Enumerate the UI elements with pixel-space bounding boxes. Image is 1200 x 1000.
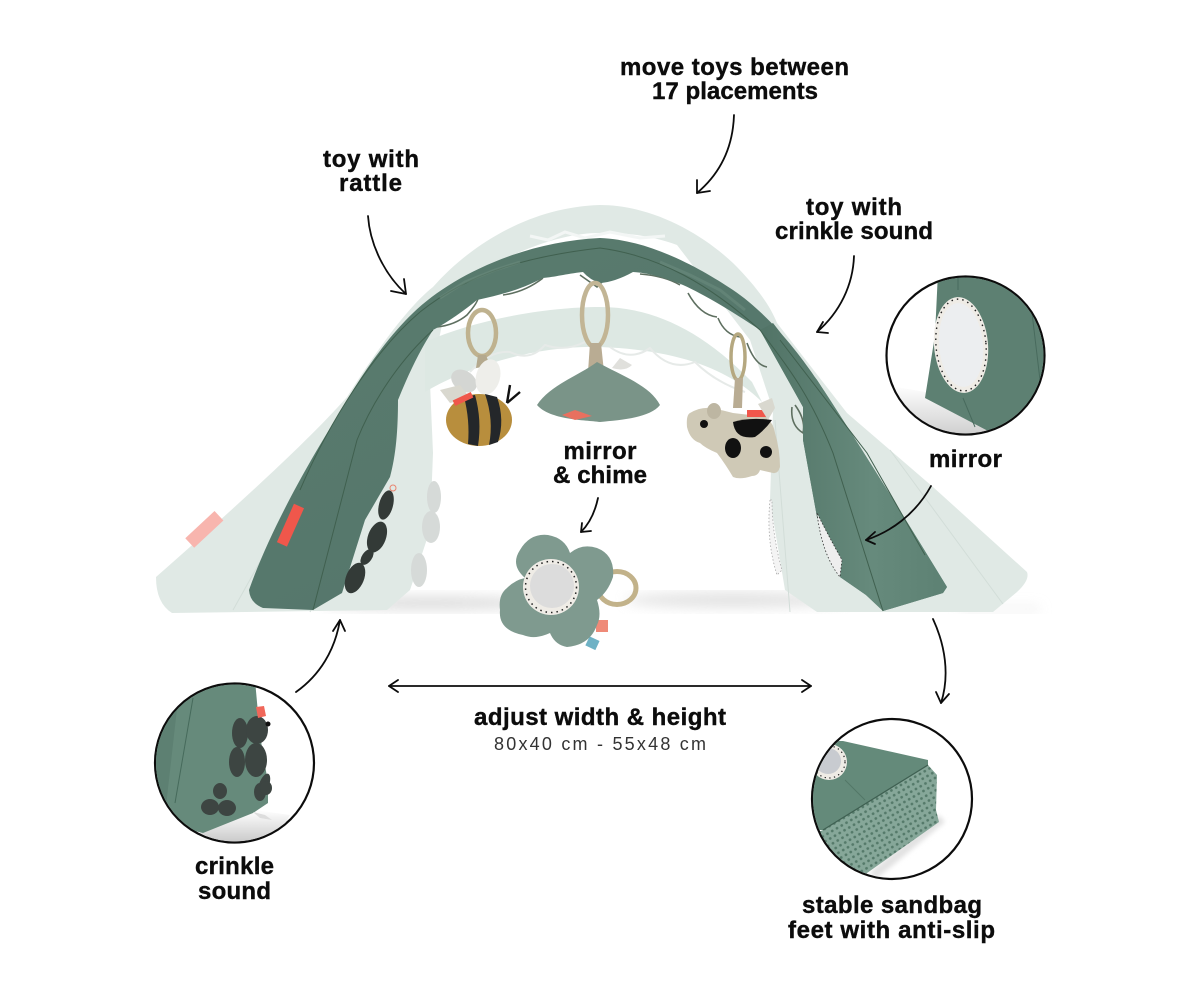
- label: crinkle sound: crinkle: [195, 853, 274, 880]
- rattle label tag: [277, 504, 304, 547]
- label: move toys between 17 placements: [620, 54, 849, 105]
- arrow: foot to sandbag circle: [933, 619, 949, 703]
- label: toy with rattle: [323, 146, 419, 197]
- label: mirror and chime: & chime: [553, 462, 647, 489]
- floor shadows: [320, 592, 1040, 612]
- right leg highlight: [760, 323, 947, 611]
- label: crinkle sound: sound: [198, 878, 271, 905]
- pale rear arch, showing the adjustment range: [156, 205, 1028, 613]
- crinkle detail circle: [150, 680, 314, 850]
- crinkle toy on leg: [341, 485, 397, 596]
- sandbag detail circle: [805, 719, 972, 885]
- label: stable sandbag feet with anti-slip: [788, 892, 995, 944]
- ghost crinkle toy: [411, 481, 441, 587]
- pale mirror sliver: [769, 500, 782, 575]
- arrow: mirror on leg: [866, 486, 931, 544]
- label: mirror and chime: mirror: [564, 438, 636, 465]
- label: toy with crinkle sound: crinkle sound: [775, 218, 933, 245]
- arrow: placements: [697, 115, 734, 193]
- label: stable sandbag feet with anti-slip: feet with anti-slip: [788, 917, 995, 944]
- label: move toys between 17 placements: 17 placements: [652, 78, 818, 105]
- label: toy with rattle: toy with: [323, 146, 419, 173]
- label: adjust width and height: adjust width & height: [474, 704, 726, 731]
- arrow: crinkle toy: [817, 256, 854, 333]
- flower toy with mirror: [500, 535, 636, 650]
- label: mirror and chime: [553, 438, 647, 489]
- pale rattle tag: [185, 511, 223, 548]
- star toy with mirror and chime: [537, 283, 660, 422]
- arch seams: [300, 248, 925, 611]
- label: toy with crinkle sound: toy with: [806, 194, 902, 221]
- arrow: flower toy: [581, 498, 598, 532]
- label: mirror right: mirror: [929, 446, 1002, 473]
- arrow: crinkle circle to leg: [296, 620, 345, 692]
- pale inner arch: [425, 307, 762, 402]
- mirror sliver on right leg: [817, 513, 842, 577]
- label: move toys between 17 placements: move toys between: [620, 54, 849, 81]
- label: toy with crinkle sound: [775, 194, 933, 245]
- toy hanging loops: [437, 272, 804, 433]
- label: crinkle sound: [195, 853, 274, 905]
- main green arch: [249, 238, 947, 611]
- double arrow: adjust width: [389, 680, 811, 692]
- cow toy with crinkle sound: [687, 334, 780, 478]
- bee toy with rattle: [440, 310, 520, 446]
- arrow: rattle: [368, 216, 406, 294]
- label: toy with rattle: rattle: [339, 170, 402, 197]
- text: dimensions: 80x40 cm - 55x48 cm: [494, 734, 706, 754]
- mirror detail circle: [885, 270, 1050, 440]
- label: stable sandbag feet with anti-slip: stable sandbag: [802, 892, 982, 919]
